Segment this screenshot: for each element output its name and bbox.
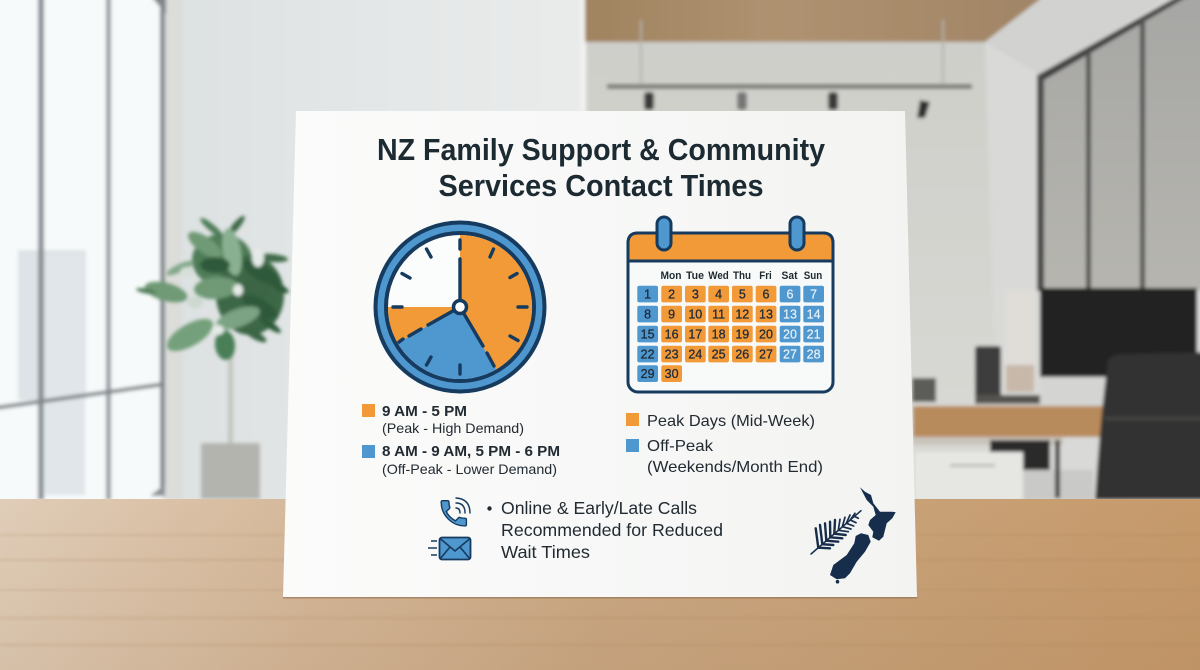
peak sector 9 to 5 <box>460 235 532 369</box>
dark date numbers: 11 <box>712 308 725 322</box>
dark date numbers: 5 <box>739 288 746 302</box>
calendar rings <box>657 217 804 250</box>
recommendation text: Recommended for Reduced <box>501 520 723 540</box>
calendar legend: Peak Days (Mid-Week) <box>647 413 815 430</box>
first column cells <box>637 286 658 382</box>
light weekend numbers: 13 <box>783 308 797 322</box>
clock legend: (Off-Peak - Lower Demand) <box>382 461 557 477</box>
dark date numbers: 10 <box>688 308 702 322</box>
light weekend numbers: 27 <box>783 348 797 362</box>
dark date numbers: 3 <box>692 288 699 302</box>
light weekend numbers: 28 <box>807 348 821 362</box>
icon: envelope <box>428 538 470 560</box>
weekday labels <box>660 270 822 282</box>
title: Services Contact Times <box>438 168 764 203</box>
south island <box>830 533 871 579</box>
light weekend numbers: 20 <box>783 328 797 342</box>
dark date numbers: 22 <box>641 348 655 362</box>
dark date numbers: 13 <box>759 308 773 322</box>
legend swatch: off-peak hours <box>362 445 375 458</box>
dark date numbers: 29 <box>641 367 655 381</box>
clock hands <box>399 259 494 366</box>
title: NZ Family Support & Community <box>377 132 826 167</box>
weekend cells <box>780 286 824 362</box>
clock chart <box>376 222 544 392</box>
dark date numbers: 19 <box>735 328 749 342</box>
potted plant <box>136 214 290 361</box>
dark date numbers: 23 <box>665 348 679 362</box>
clock legend: 8 AM - 9 AM, 5 PM - 6 PM <box>382 444 560 460</box>
weekday labels: Mon <box>660 270 682 282</box>
icon: phone <box>441 498 470 526</box>
calendar legend: Off-Peak <box>647 438 714 455</box>
clock legend: 9 AM - 5 PM <box>382 404 467 420</box>
stewart island <box>836 580 839 584</box>
dark date numbers: 16 <box>665 328 679 342</box>
clock legend <box>362 404 560 477</box>
weekday labels: Thu <box>733 270 751 282</box>
dark date numbers: 15 <box>641 328 655 342</box>
recommendation text: Wait Times <box>501 542 590 562</box>
dark date numbers: 17 <box>688 328 702 342</box>
dark date numbers: 1 <box>644 288 651 302</box>
icon: New Zealand map <box>830 487 896 584</box>
dark date numbers: 24 <box>688 348 702 362</box>
clock ticks <box>393 240 527 374</box>
light weekend numbers: 14 <box>807 308 821 322</box>
calendar legend: (Weekends/Month End) <box>647 459 823 476</box>
calendar <box>628 217 833 392</box>
dark date numbers: 18 <box>712 328 726 342</box>
dark date numbers: 20 <box>759 328 773 342</box>
weekday labels: Fri <box>759 270 772 282</box>
north island <box>860 487 896 541</box>
clock legend: (Peak - High Demand) <box>382 420 524 436</box>
recommendation text: Online & Early/Late Calls <box>501 498 697 518</box>
legend swatch: peak hours <box>362 404 375 417</box>
peak sector 8 to 9 <box>388 307 460 343</box>
off-peak sector <box>398 307 496 379</box>
legend swatch: peak days <box>626 413 639 426</box>
weekday labels: Sat <box>782 270 798 282</box>
recommendation text <box>487 498 723 562</box>
light weekend numbers: 6 <box>787 288 794 302</box>
peak weekday cells <box>661 286 776 382</box>
dark date numbers: 27 <box>759 348 773 362</box>
legend swatch: off-peak days <box>626 439 639 452</box>
dark date numbers: 4 <box>715 288 722 302</box>
background: blurred office room <box>0 0 1200 510</box>
dark date numbers <box>641 288 773 381</box>
icon: silver fern <box>811 511 861 554</box>
dark date numbers: 25 <box>712 348 726 362</box>
dark date numbers: 12 <box>735 308 749 322</box>
dark date numbers: 6 <box>763 288 770 302</box>
calendar header <box>628 233 833 261</box>
dark date numbers: 9 <box>668 308 675 322</box>
title <box>377 132 826 203</box>
sign board <box>283 111 917 598</box>
dark date numbers: 30 <box>665 367 679 381</box>
light weekend numbers: 7 <box>810 288 817 302</box>
dark date numbers: 2 <box>668 288 675 302</box>
dark date numbers: 8 <box>644 308 651 322</box>
weekday labels: Sun <box>804 270 822 282</box>
light weekend numbers: 21 <box>807 328 821 342</box>
light weekend numbers <box>783 288 821 362</box>
wooden table <box>0 499 1200 670</box>
weekday labels: Tue <box>686 270 704 282</box>
weekday labels: Wed <box>708 270 729 282</box>
calendar legend <box>626 413 823 476</box>
dark date numbers: 26 <box>735 348 749 362</box>
